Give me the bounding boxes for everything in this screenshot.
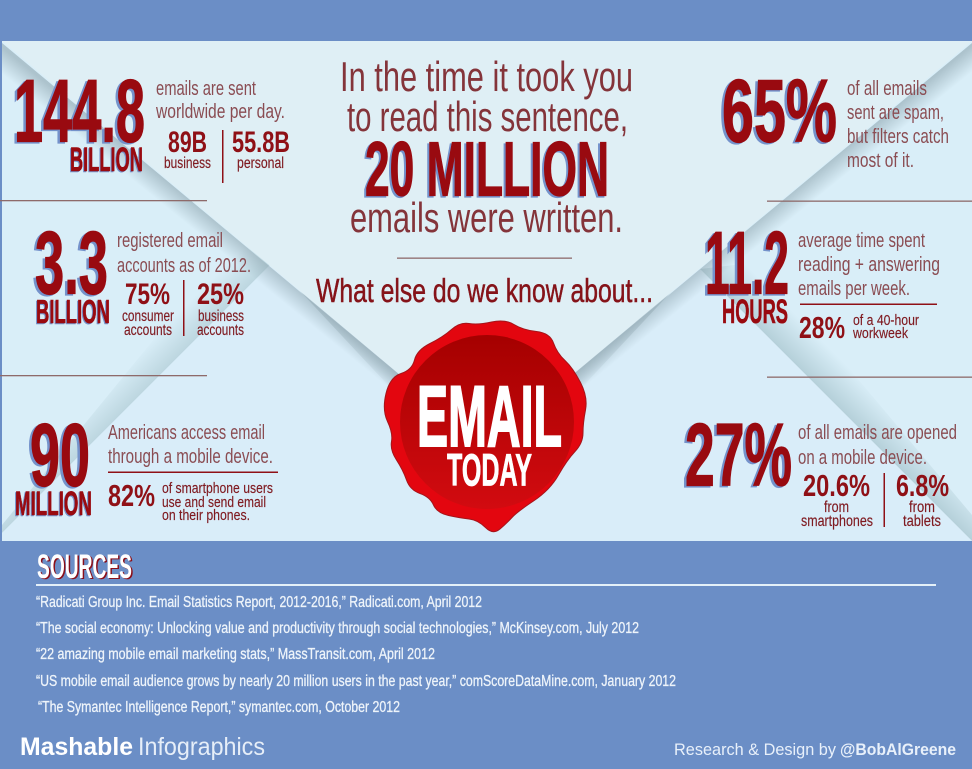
headline: 20 million emails xyxy=(340,53,633,241)
description: through a mobile device. xyxy=(108,446,273,468)
icon: wax seal xyxy=(384,321,586,532)
headline intro: In the time it took you xyxy=(340,53,633,100)
logo: Mashable Infographics xyxy=(20,733,265,761)
breakdown: 82 percent of smartphone users: use and send email xyxy=(162,494,266,511)
breakdown: 82 percent of smartphone users xyxy=(108,478,273,524)
breakdown: business and personal xyxy=(164,126,290,183)
headline number: 20 million xyxy=(363,126,609,214)
source list: “The Symantec Intelligence Report,” symantec.com, October 2012 xyxy=(38,699,400,716)
subheading: What else do we know about... xyxy=(316,272,653,309)
description: Americans access email xyxy=(108,422,265,444)
breakdown: smartphones and tablets: from xyxy=(909,499,935,516)
number: 65% xyxy=(720,60,837,162)
logo: Mashable Infographics: Mashable xyxy=(20,733,133,761)
number: 27%: 27% xyxy=(682,406,790,506)
breakdown: 82 percent of smartphone users: of smartphone users xyxy=(162,480,273,497)
source list xyxy=(36,594,676,716)
unit: million: MILLION xyxy=(14,486,91,524)
panel: envelope xyxy=(2,41,972,541)
headline end: emails were written. xyxy=(350,194,623,241)
source list: “22 amazing mobile email marketing stats,” MassTransit.com, April 2012 xyxy=(36,646,435,663)
unit: hours: HOURS xyxy=(722,293,788,331)
number: 65%: 65% xyxy=(720,62,834,162)
breakdown: consumer and business: accounts xyxy=(197,322,244,339)
breakdown: 28 percent of workweek: 28% xyxy=(799,310,845,345)
description xyxy=(798,230,940,300)
logo: Mashable Infographics: Infographics xyxy=(138,733,265,761)
breakdown: smartphones and tablets: from xyxy=(824,499,849,516)
number: 11.2: 11.2 xyxy=(702,214,786,314)
breakdown: 28 percent of workweek xyxy=(799,310,919,345)
breakdown: smartphones and tablets: tablets xyxy=(903,513,941,530)
number: 144.8: 144.8 xyxy=(12,62,142,162)
credit: research and design: Research & Design by xyxy=(674,740,836,759)
number: 144.8: 144.8 xyxy=(14,60,145,160)
headline number: 20 million: 20 MILLION xyxy=(363,128,607,214)
breakdown: smartphones and tablets: 6.8% xyxy=(896,468,949,503)
description: on a mobile device. xyxy=(798,447,927,469)
number: 90: 90 xyxy=(28,406,88,506)
number: 3.3: 3.3 xyxy=(32,214,106,314)
number: 90 xyxy=(28,404,90,506)
description: registered email xyxy=(117,230,223,252)
description: average time spent xyxy=(798,230,925,252)
breakdown: 28 percent of workweek: of a 40-hour xyxy=(853,312,919,329)
description: of all emails xyxy=(847,78,927,100)
description xyxy=(847,78,949,172)
breakdown: consumer and business xyxy=(122,278,244,339)
description: accounts as of 2012. xyxy=(117,255,251,277)
seal text: today: TODAY xyxy=(447,444,532,496)
unit: billion: BILLION xyxy=(35,294,109,331)
number: 27%: 27% xyxy=(685,404,792,504)
headline intro: to read this sentence, xyxy=(347,93,628,140)
source list: “The social economy: Unlocking value and productivity through social technologies,” McKinsey.com, July 2012 xyxy=(36,620,639,637)
number: 3.3: 3.3 xyxy=(35,212,108,312)
description: emails per week. xyxy=(798,278,910,300)
number: 65%: 65% xyxy=(722,60,837,160)
stat: 144.8 billion emails per day xyxy=(12,60,290,183)
breakdown: smartphones and tablets: smartphones xyxy=(801,513,873,530)
breakdown: consumer and business: accounts xyxy=(124,322,172,339)
breakdown: business and personal: personal xyxy=(237,155,284,172)
unit: million xyxy=(14,485,92,524)
breakdown: 82 percent of smartphone users: 82% xyxy=(108,478,155,513)
seal text: email: EMAIL xyxy=(417,369,562,465)
breakdown: business and personal: 89B xyxy=(168,126,207,159)
description xyxy=(117,230,251,277)
stat: 27 percent opened on mobile xyxy=(682,404,957,530)
breakdown: business and personal: 55.8B xyxy=(232,126,290,159)
unit: billion: BILLION xyxy=(36,293,110,330)
breakdown: smartphones and tablets xyxy=(801,468,949,530)
unit: billion: BILLION xyxy=(70,141,143,179)
heading: sources: SOURCES xyxy=(37,548,132,586)
breakdown: business and personal: business xyxy=(164,155,211,172)
source list: “US mobile email audience grows by nearly 20 million users in the past year,” comScoreDataMine.com, January 2012 xyxy=(36,673,676,690)
unit: billion xyxy=(35,293,110,331)
unit: million: MILLION xyxy=(15,485,92,523)
description xyxy=(155,78,285,123)
breakdown: smartphones and tablets: 20.6% xyxy=(803,468,870,503)
number: 3.3 xyxy=(32,212,108,314)
heading: sources xyxy=(37,548,134,587)
number: 11.2 xyxy=(702,212,789,314)
stat: 11.2 hours per week xyxy=(702,212,940,345)
breakdown: consumer and business: 75% xyxy=(125,278,170,311)
stat: 65 percent spam xyxy=(720,60,949,172)
number: 144.8 xyxy=(12,60,145,162)
description: most of it. xyxy=(847,150,914,172)
number: 27% xyxy=(682,404,792,506)
description xyxy=(798,422,957,469)
source list: “Radicati Group Inc. Email Statistics Report, 2012-2016,” Radicati.com, April 2012 xyxy=(36,594,482,611)
breakdown: consumer and business: 25% xyxy=(197,278,244,311)
unit: billion xyxy=(69,141,143,180)
credit: research and design xyxy=(674,740,956,759)
breakdown: 28 percent of workweek: workweek xyxy=(852,325,908,342)
breakdown: consumer and business: consumer xyxy=(122,308,174,325)
stat: 3.3 billion email accounts xyxy=(32,212,251,339)
heading: sources: SOURCES xyxy=(38,549,134,587)
breakdown: 82 percent of smartphone users: on their phones. xyxy=(162,507,250,524)
description xyxy=(108,422,273,468)
credit: research and design: @BobAlGreene xyxy=(840,740,956,759)
number: 90: 90 xyxy=(30,404,90,504)
unit: billion: BILLION xyxy=(69,142,142,180)
breakdown: consumer and business: business xyxy=(198,308,244,325)
description: worldwide per day. xyxy=(155,101,285,123)
description: emails are sent xyxy=(156,78,256,100)
headline intro xyxy=(340,53,633,140)
headline number: 20 million: 20 MILLION xyxy=(365,126,609,212)
stat: 11.2 hours per week: 11.2 xyxy=(705,212,789,312)
stat: 90 million mobile users xyxy=(14,404,278,524)
